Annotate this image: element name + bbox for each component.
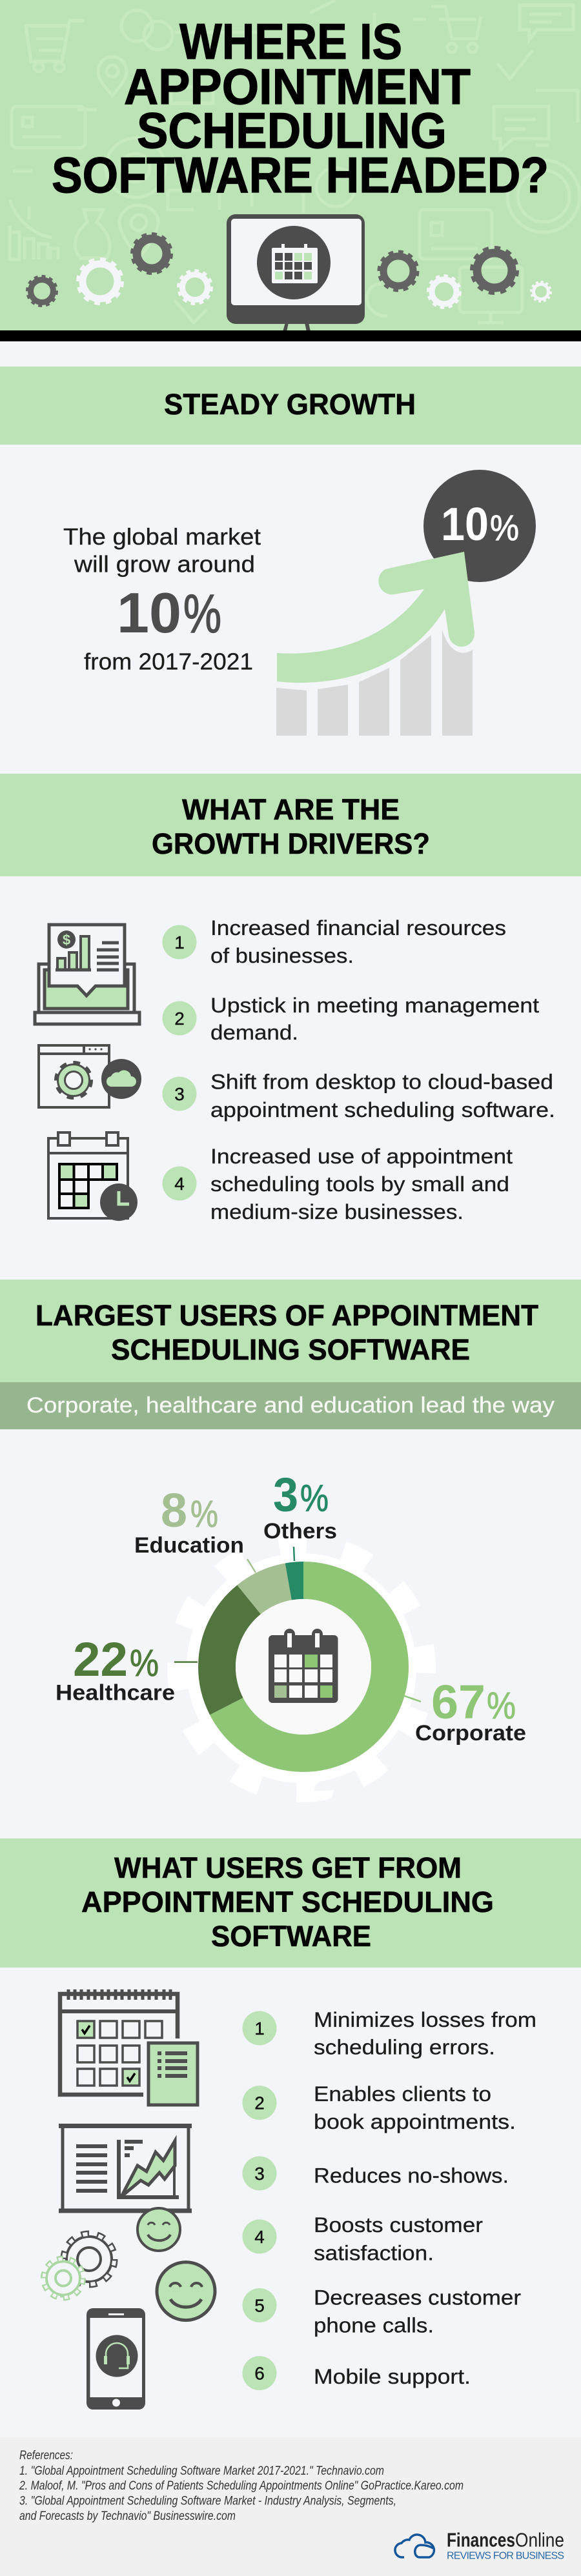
benefit 1: scheduling errors. (314, 2036, 495, 2059)
logo: FinancesOnline: Online (515, 2528, 564, 2551)
label: corporate: 67 (431, 1675, 485, 1729)
text block: market growth: from 2017-2021 (84, 648, 253, 675)
references (19, 2449, 464, 2523)
text block: market growth: will grow around (74, 551, 255, 577)
label: healthcare: Healthcare (56, 1680, 175, 1705)
icon: calendar with checklist (60, 1989, 198, 2105)
label: education (134, 1484, 256, 1573)
item 2: demand. (210, 1021, 298, 1044)
icon: large smiley (157, 2262, 215, 2320)
logo: FinancesOnline: Finances (447, 2528, 515, 2551)
item 4 (163, 1145, 513, 1223)
icon: small smiley (138, 2208, 180, 2251)
label: education: Education (134, 1533, 244, 1558)
icon: calendar (269, 1629, 338, 1703)
icon: presentation board with chart (59, 2126, 192, 2211)
label: healthcare: 22 (73, 1633, 128, 1686)
label: education: 8 (161, 1484, 187, 1537)
references: 2. Maloof, M. "Pros and Cons of Patients Scheduling Appointments Online" GoPractice.Kareo.com (19, 2479, 464, 2493)
heading: LARGEST USERS OF APPOINTMENT (36, 1299, 538, 1332)
benefit 6 (243, 2356, 471, 2390)
list: benefits (243, 2008, 536, 2390)
title (52, 13, 549, 203)
item 3 (163, 1070, 555, 1122)
subheading band: Corporate, healthcare and education lead the way (26, 1393, 555, 1418)
icon: calendar with clock (48, 1132, 138, 1221)
heading: WHAT ARE THE (182, 793, 400, 826)
references: 1. "Global Appointment Scheduling Software Market 2017-2021." Technavio.com (19, 2464, 384, 2478)
item 3: 3 (174, 1084, 185, 1104)
item 4: medium-size businesses. (210, 1200, 464, 1223)
benefit 5 (243, 2286, 521, 2337)
panel: footer (0, 2437, 581, 2576)
item 2 (163, 994, 539, 1044)
title: APPOINTMENT (124, 58, 471, 115)
item 1 (163, 916, 506, 967)
label: corporate: Corporate (415, 1721, 526, 1746)
label: healthcare: % (130, 1642, 159, 1684)
text block: market growth: 10 (117, 581, 181, 645)
subheading band (0, 1382, 581, 1429)
text block: market growth: The global market (63, 523, 261, 550)
text block: market growth: % (183, 583, 221, 644)
benefit 3: 3 (254, 2164, 265, 2184)
icon: settings window with cloud (39, 1045, 141, 1107)
title: SOFTWARE HEADED? (52, 146, 549, 203)
benefit 1: 1 (254, 2018, 265, 2038)
label: others: % (300, 1478, 329, 1519)
heading (36, 1299, 538, 1366)
label: others: Others (263, 1519, 337, 1544)
heading (152, 793, 430, 860)
benefit 6: Mobile support. (314, 2365, 471, 2388)
benefit 4: Boosts customer (314, 2213, 483, 2237)
panel: largest users (0, 1280, 581, 1813)
icon: laptop with report (35, 925, 139, 1024)
panel: user benefits (0, 1838, 581, 2410)
references: References: (19, 2449, 73, 2462)
benefit 1 (243, 2008, 536, 2059)
item 3: appointment scheduling software. (210, 1098, 555, 1122)
heading: STEADY GROWTH (164, 388, 416, 421)
benefit 4: satisfaction. (314, 2242, 434, 2265)
benefit 2: book appointments. (314, 2110, 516, 2133)
item 4: 4 (174, 1174, 185, 1194)
benefit 2 (243, 2082, 516, 2133)
benefit 4 (243, 2213, 483, 2265)
benefit 6: 6 (254, 2364, 265, 2384)
chart: donut (156, 1523, 447, 1813)
text block: market growth (63, 523, 261, 675)
chart: rising bars with arrow (276, 470, 536, 736)
panel: steady growth (0, 367, 581, 736)
benefit 5: 5 (254, 2296, 265, 2315)
icon: gears (44, 2234, 114, 2297)
benefit 3 (243, 2157, 509, 2190)
item 2: Upstick in meeting management (210, 994, 539, 1017)
references: and Forecasts by Technavio" Businesswire.com (19, 2510, 236, 2523)
benefit 3: Reduces no-shows. (314, 2164, 509, 2188)
item 1: Increased financial resources (210, 916, 506, 940)
title: WHERE IS (179, 13, 402, 70)
references: 3. "Global Appointment Scheduling Software Market - Industry Analysis, Segments, (19, 2495, 396, 2508)
panel: header (0, 0, 581, 341)
list: growth drivers (163, 916, 555, 1223)
item 2: 2 (174, 1009, 185, 1029)
heading (81, 1851, 494, 1953)
background line icons (10, 0, 580, 323)
benefit 5: Decreases customer (314, 2286, 521, 2309)
benefit 2: 2 (254, 2093, 265, 2113)
gears (28, 235, 551, 307)
item 1: 1 (174, 932, 185, 952)
item 3: Shift from desktop to cloud-based (210, 1070, 553, 1093)
logo: FinancesOnline (395, 2528, 564, 2561)
label: others (263, 1467, 337, 1561)
panel: growth drivers (0, 774, 581, 1223)
item 4: scheduling tools by small and (210, 1172, 509, 1196)
benefit 5: phone calls. (314, 2314, 434, 2337)
heading: SCHEDULING SOFTWARE (111, 1333, 470, 1366)
heading: GROWTH DRIVERS? (152, 827, 430, 860)
chart: rising bars with arrow: % (490, 507, 519, 548)
benefit 2: Enables clients to (314, 2082, 491, 2106)
item 4: Increased use of appointment (210, 1145, 513, 1168)
icon: monitor with calendar (227, 214, 365, 332)
icon: phone with headset (87, 2308, 145, 2410)
icon: laptop with report: $ (63, 932, 70, 948)
label: healthcare (56, 1633, 198, 1705)
label: others: 3 (273, 1467, 298, 1522)
chart: rising bars with arrow: 10 (441, 499, 489, 550)
logo: FinancesOnline: REVIEWS FOR BUSINESS (447, 2550, 564, 2561)
label: corporate (404, 1675, 526, 1746)
heading: SOFTWARE (211, 1920, 371, 1953)
benefit 1: Minimizes losses from (314, 2008, 536, 2031)
label: education: % (190, 1493, 218, 1535)
label: corporate: % (487, 1685, 516, 1727)
item 1: of businesses. (210, 944, 354, 967)
heading: WHAT USERS GET FROM (114, 1851, 462, 1884)
heading: APPOINTMENT SCHEDULING (81, 1886, 494, 1918)
benefit 4: 4 (254, 2227, 265, 2247)
title: SCHEDULING (137, 102, 447, 159)
